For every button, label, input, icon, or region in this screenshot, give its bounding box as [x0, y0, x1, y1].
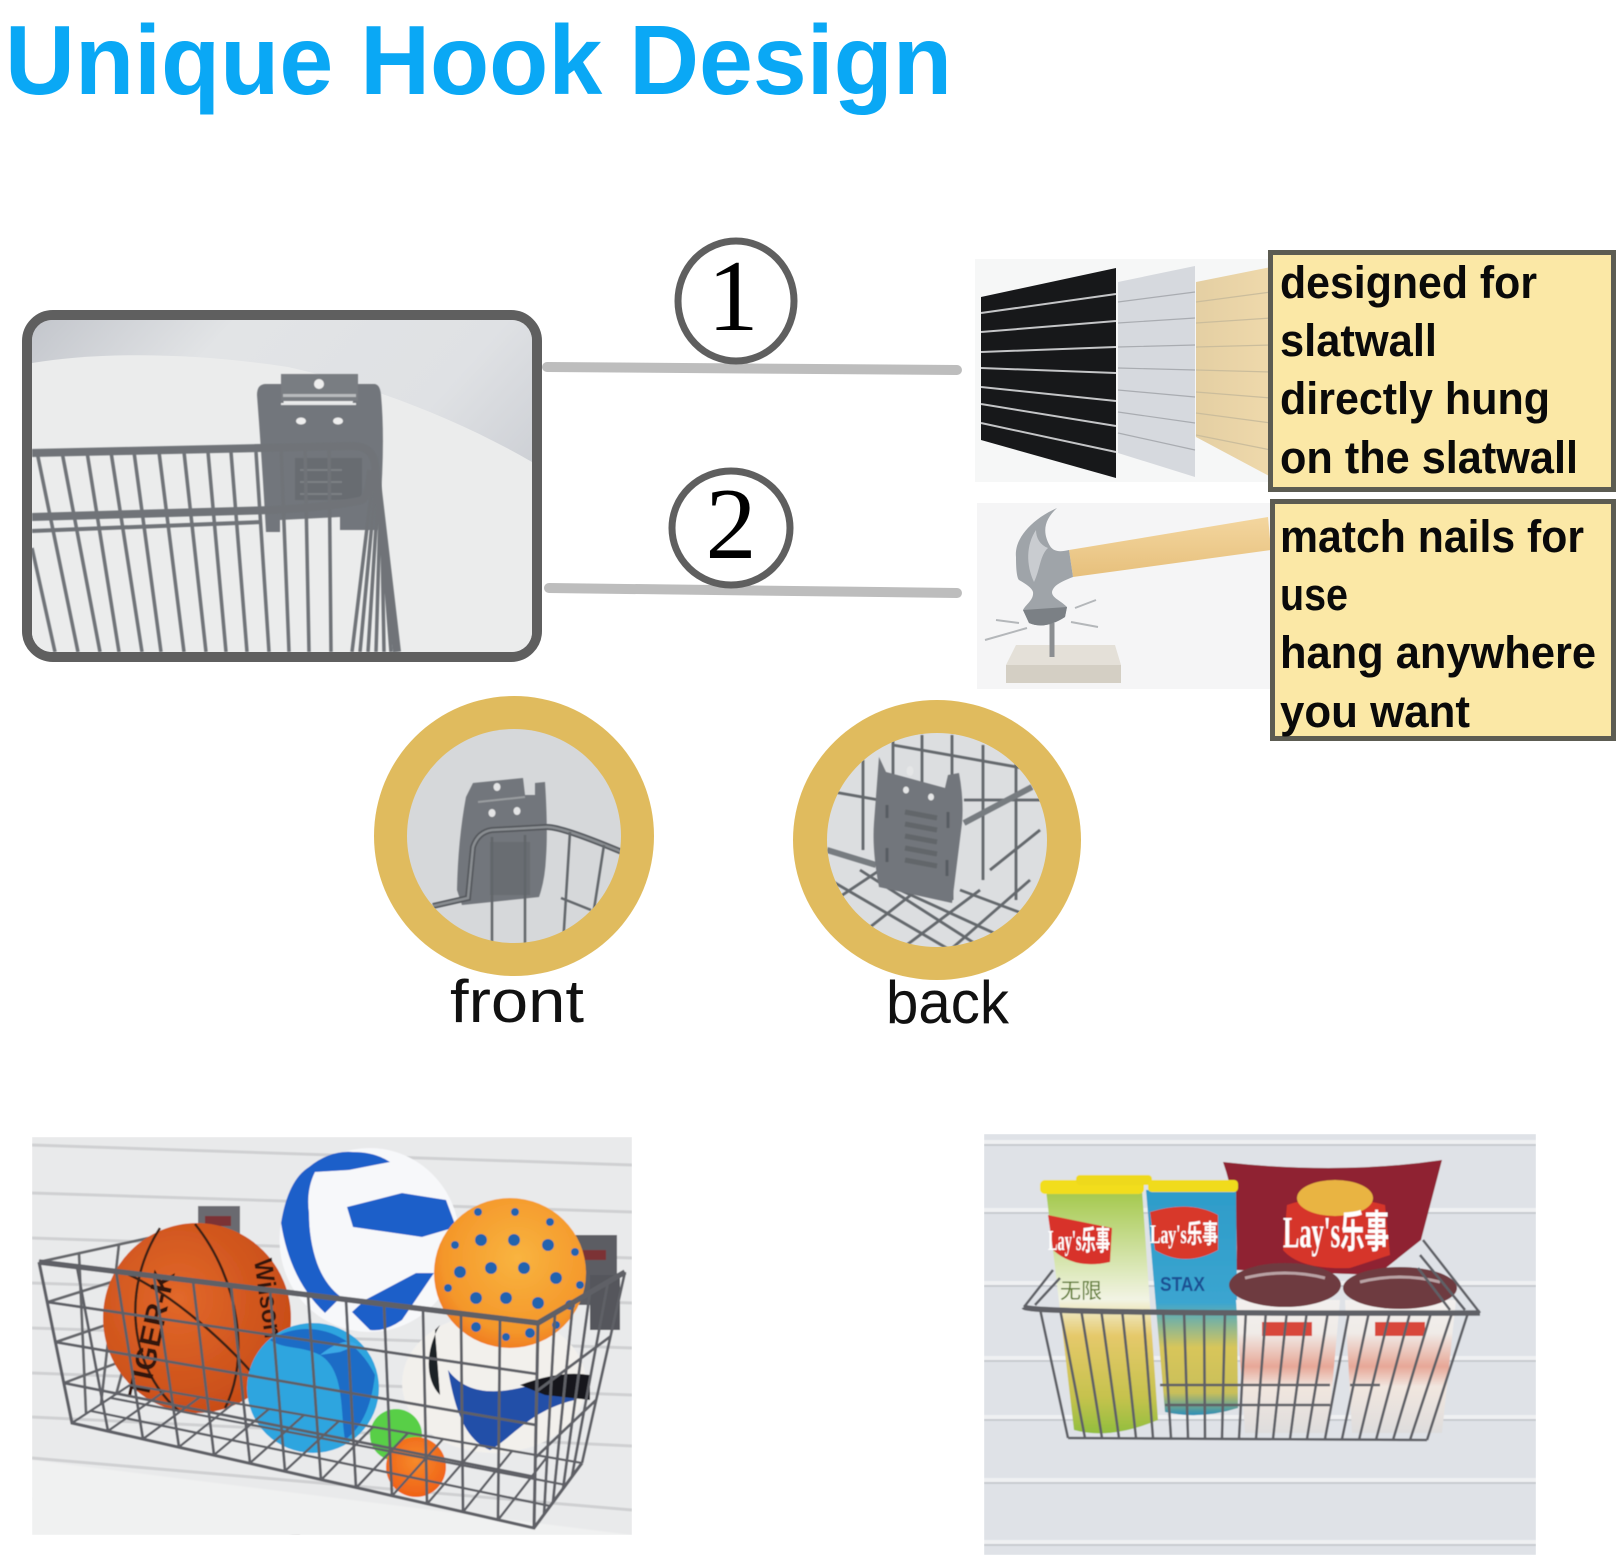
icon: wire basket [32, 446, 397, 652]
icon: basketball [103, 1223, 291, 1413]
text box: designed for slatwall [1270, 252, 1614, 490]
numbered badge 1 [678, 240, 794, 361]
numbered badge 2 [672, 468, 790, 585]
text box: match nails: you want [1280, 686, 1470, 737]
photo: basket with snacks [984, 1134, 1536, 1555]
icon: volleyball [280, 1148, 460, 1332]
icon: wood block [1006, 645, 1121, 683]
text box: designed for slatwall: designed for [1280, 257, 1537, 308]
icon: mounting brackets [198, 1206, 620, 1330]
connector line 1 [547, 367, 957, 370]
icon: milk tea cups [1229, 1263, 1457, 1433]
icon: blue chip can: STAX [1160, 1274, 1206, 1296]
icon: hook plate [257, 374, 383, 532]
icon: small orange ball [386, 1437, 446, 1497]
panel: hammer image [977, 503, 1271, 689]
icon: front basket wire [433, 827, 622, 906]
icon: blue chip can [1146, 1180, 1238, 1415]
photo: basket with sports balls [32, 1137, 632, 1535]
icon: basketball: TIGER-K [123, 1267, 182, 1401]
text box: designed for slatwall: directly hung [1280, 373, 1550, 424]
icon: green chip can: 无限 [1060, 1280, 1102, 1303]
slatwall grooves [984, 1142, 1536, 1542]
icon: basket wires [1024, 1240, 1480, 1440]
text box: match nails: use [1280, 569, 1348, 620]
icon: basketball: Wilson [248, 1257, 289, 1340]
icon: front hook plate [457, 778, 547, 905]
icon: impact sparks [985, 600, 1098, 640]
title: Unique Hook Design [5, 5, 952, 115]
text box: match nails: match nails for [1280, 511, 1584, 562]
icon: back basket grid [830, 735, 1045, 950]
numbered badge 1: 1 [708, 240, 758, 353]
icon: nail [1050, 623, 1054, 657]
icon: basket front wires [39, 1262, 625, 1528]
text box: designed for slatwall: on the slatwall [1280, 432, 1578, 483]
icon: blue ball [247, 1323, 379, 1453]
icon: chip bag [1223, 1160, 1442, 1275]
icon: green chip can [1040, 1175, 1158, 1433]
icon: hammer [1016, 508, 1271, 625]
slatwall grooves [32, 1145, 632, 1535]
numbered badge 2: 2 [706, 468, 756, 581]
icon: spiked orange ball [434, 1198, 586, 1348]
front view medallion [374, 696, 654, 976]
icon: soccer ball [402, 1313, 590, 1453]
front caption: front [450, 968, 584, 1035]
icon: green chip can: Lay's乐事 [1048, 1225, 1110, 1257]
icon: basket back wires [38, 1236, 149, 1414]
icon: chip bag: Lay's乐事 [1283, 1208, 1389, 1257]
text box: match nails: hang anywhere [1280, 627, 1596, 678]
connector line 2 [549, 588, 957, 593]
text box: match nails [1272, 502, 1614, 738]
icon: back hook plate [874, 757, 963, 903]
back view medallion [793, 700, 1081, 980]
text box: designed for slatwall: slatwall [1280, 315, 1437, 366]
panel: slatwall image [975, 259, 1271, 482]
panel: hook close-up photo [27, 315, 537, 657]
icon: blue chip can: Lay's乐事 [1150, 1220, 1218, 1249]
icon: green ball [370, 1409, 422, 1461]
back caption: back [886, 969, 1010, 1036]
